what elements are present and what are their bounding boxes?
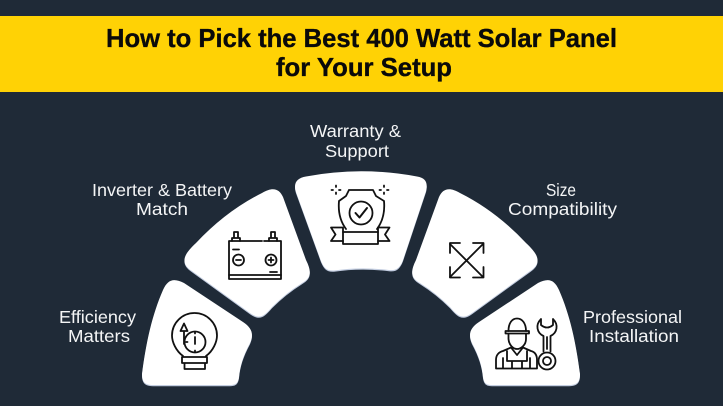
label: size compatibility (508, 180, 617, 219)
label: warranty and support: Warranty & (310, 121, 401, 141)
title (106, 23, 617, 82)
icon: worker with wrench (496, 318, 557, 370)
label: inverter and battery match (92, 180, 232, 219)
label: inverter and battery match: Match (136, 199, 188, 219)
panel: efficiency matters (142, 280, 252, 386)
label: professional installation: Professional (583, 307, 682, 327)
label: size compatibility: Size (546, 180, 576, 200)
title: for Your Setup (276, 52, 452, 82)
label: professional installation: Installation (589, 326, 679, 346)
label: warranty and support: Support (325, 141, 389, 161)
label: size compatibility: Compatibility (508, 199, 617, 219)
icon: shield with ribbon (331, 186, 390, 244)
label: efficiency matters: Matters (68, 326, 130, 346)
icon: light bulb with clock (172, 313, 217, 369)
panel: warranty and support (295, 171, 427, 272)
label: professional installation (583, 307, 682, 346)
icon: battery (229, 232, 281, 279)
label: warranty and support (310, 121, 401, 161)
panel: professional installation (470, 280, 580, 386)
label: efficiency matters (59, 307, 136, 346)
panel: size compatibility (412, 189, 538, 318)
label: efficiency matters: Efficiency (59, 307, 136, 327)
title banner (0, 16, 723, 92)
icon: expand arrows (450, 243, 484, 278)
title: How to Pick the Best 400 Watt Solar Panel (106, 23, 617, 53)
label: inverter and battery match: Inverter & Battery (92, 180, 232, 200)
panel: inverter and battery match (184, 189, 310, 318)
